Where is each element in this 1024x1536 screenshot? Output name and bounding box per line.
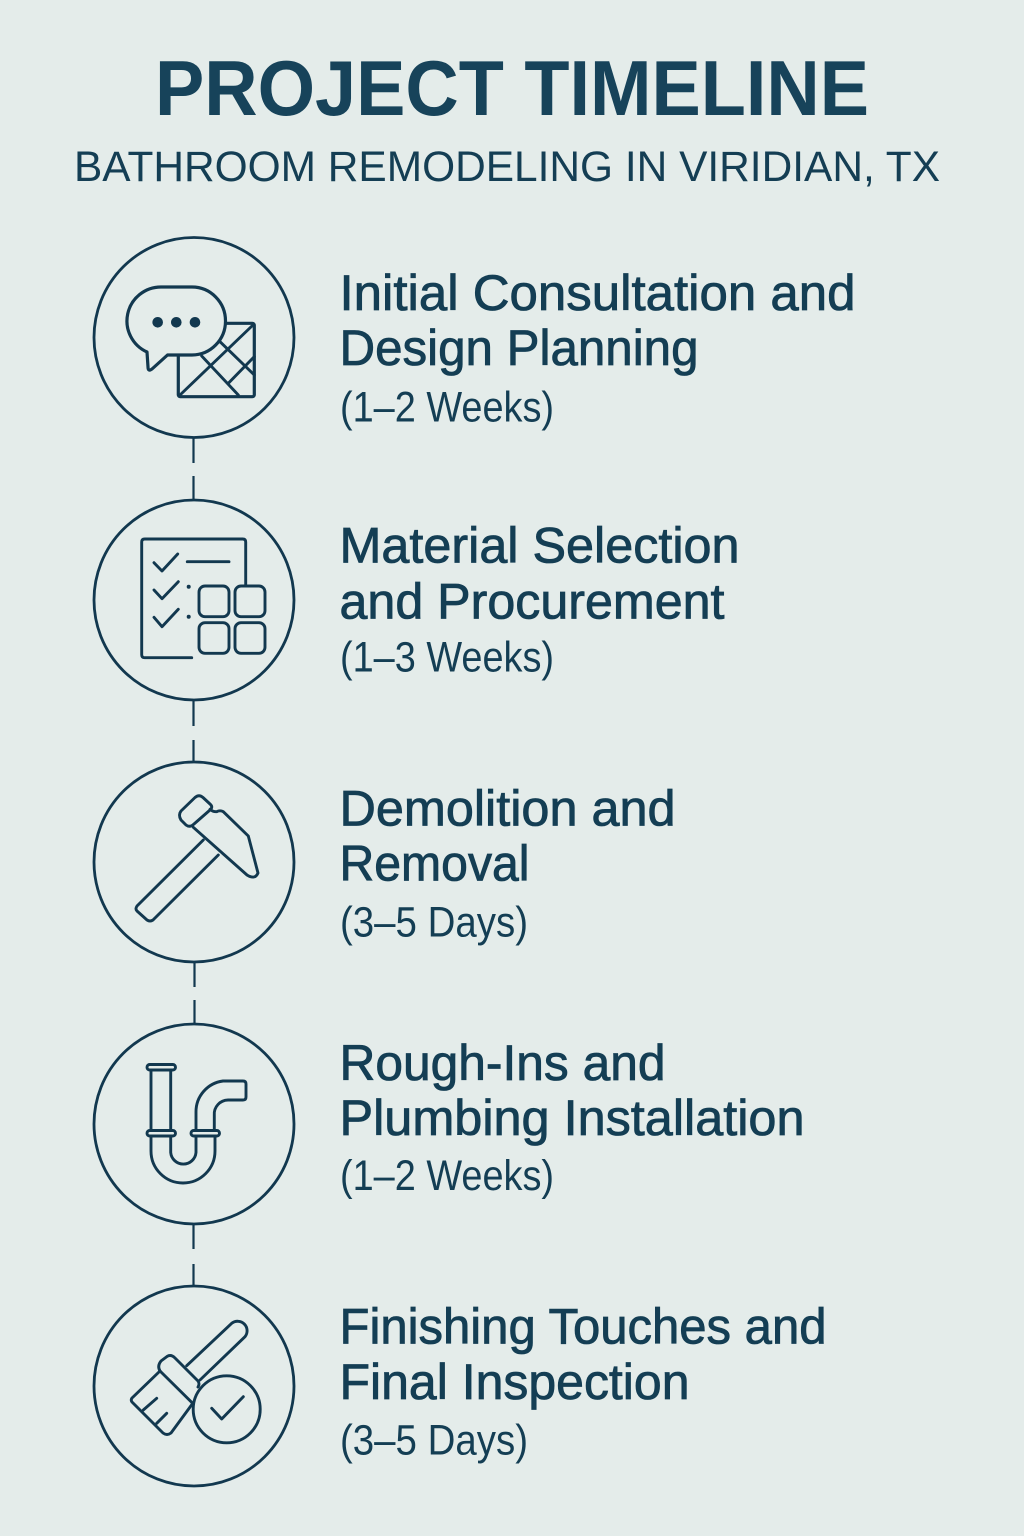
step 4 text: Rough-Ins and xyxy=(340,1035,666,1091)
step 2 text: and Procurement xyxy=(340,573,725,629)
step 1 text: Design Planning xyxy=(340,320,698,376)
step 5 text xyxy=(340,1298,826,1464)
step 1 text: Initial Consultation and xyxy=(340,265,856,321)
step 3 text: (3–5 Days) xyxy=(340,899,528,947)
step 1 text: (1–2 Weeks) xyxy=(340,384,554,432)
step 1: consultation and design xyxy=(94,238,856,438)
step 3: demolition xyxy=(94,762,676,962)
step 5 text: Final Inspection xyxy=(340,1354,690,1410)
step 4 text: Plumbing Installation xyxy=(340,1090,804,1146)
step 4 text: (1–2 Weeks) xyxy=(340,1152,554,1200)
step 5 text: (3–5 Days) xyxy=(340,1416,528,1464)
step 4: rough-ins and plumbing xyxy=(94,1024,804,1224)
step 3 text: Removal xyxy=(340,836,530,892)
step 2 text: (1–3 Weeks) xyxy=(340,634,554,682)
icon: hammer in circle xyxy=(94,762,294,962)
icon: p-trap pipe in circle xyxy=(94,1024,294,1224)
step 2: material selection xyxy=(94,500,740,700)
step 3 text: Demolition and xyxy=(340,781,676,837)
icon: checklist and swatches in circle xyxy=(94,500,294,700)
step 1 text xyxy=(340,265,856,432)
step 5: finishing touches xyxy=(94,1286,826,1486)
title: PROJECT TIMELINE xyxy=(155,44,869,132)
connector: step 1 to 2 xyxy=(192,438,195,500)
step 2 text: Material Selection xyxy=(340,518,740,574)
step 5 text: Finishing Touches and xyxy=(340,1298,826,1354)
icon: paint brush and check badge in circle xyxy=(94,1286,294,1486)
icon: speech bubble and tile in circle xyxy=(94,238,294,438)
subtitle: BATHROOM REMODELING IN VIRIDIAN, TX xyxy=(74,144,940,191)
connector: step 4 to 5 xyxy=(192,1224,195,1286)
step 3 text xyxy=(340,781,676,947)
step 2 text xyxy=(340,518,740,682)
connector: step 2 to 3 xyxy=(192,700,195,762)
connector: step 3 to 4 xyxy=(193,962,196,1024)
step 4 text xyxy=(340,1035,804,1200)
